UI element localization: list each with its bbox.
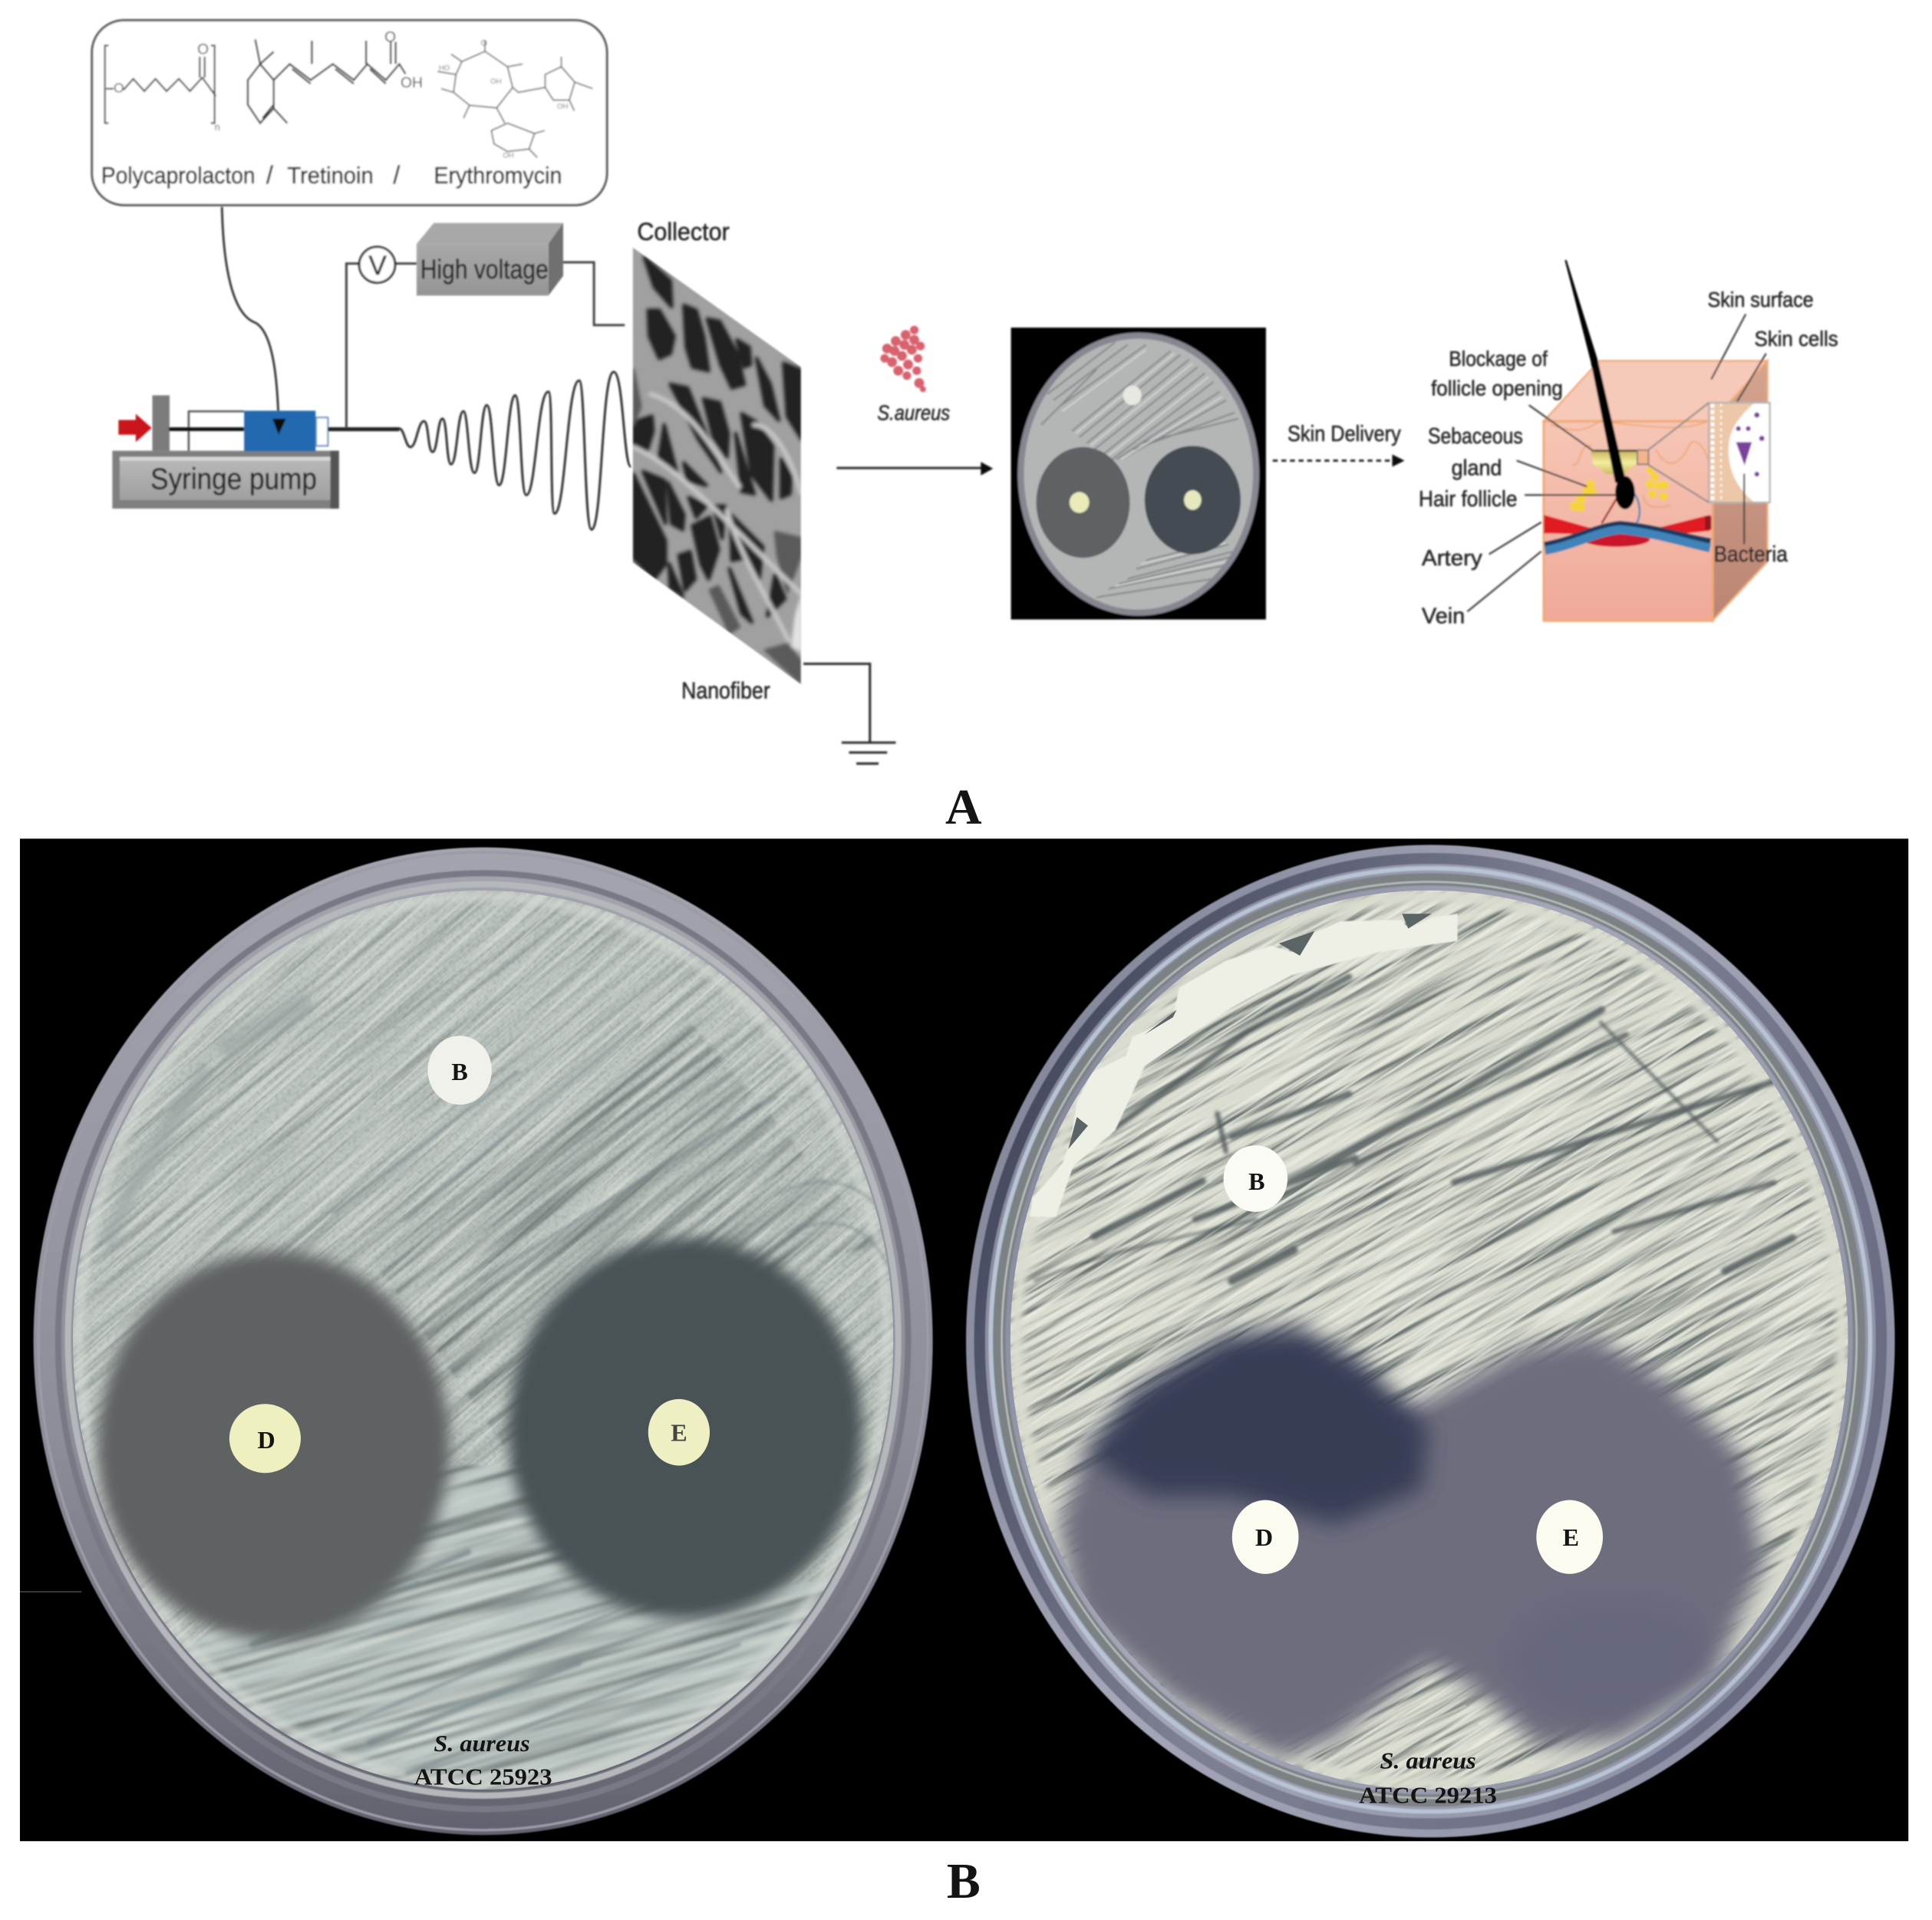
label: blockage of follicle opening: [1431, 347, 1563, 400]
icon: voltmeter: V: [368, 251, 387, 281]
disc D: D: [257, 1426, 275, 1454]
lower streak patch: [1306, 1690, 1491, 1786]
follicle capillaries: [1601, 499, 1617, 523]
gray mottled patches near edge: [105, 1001, 309, 1244]
label: hair follicle: Hair follicle: [1419, 487, 1517, 512]
label: artery: Artery: [1422, 546, 1482, 571]
label: skin surface: Skin surface: [1708, 288, 1814, 311]
blue tint in lower right of zone: [1509, 1601, 1719, 1724]
arrow: solution to syringe: [222, 207, 286, 435]
disc D: [229, 1404, 301, 1473]
structure: erythromycin: OH: [557, 102, 568, 110]
structure: tretinoin: OH: [401, 75, 423, 91]
nanofiber SEM collector: [628, 240, 807, 690]
high voltage wiring: [346, 262, 625, 429]
vein: [1545, 527, 1710, 551]
structure: polycaprolactone: O: [114, 80, 124, 95]
label: nanofiber: Nanofiber: [681, 677, 770, 703]
disc D: [1232, 1500, 1298, 1574]
skin cross-section block: [1544, 260, 1770, 621]
structure: tretinoin: O: [384, 30, 396, 46]
pusher post: [153, 395, 170, 451]
label: erythromycin: Erythromycin: [434, 163, 562, 189]
disc E: E: [1563, 1523, 1579, 1551]
dish rim: [966, 845, 1895, 1837]
structure: erythromycin: O: [480, 38, 487, 48]
lower streak field: [185, 1466, 887, 1796]
pale band beyond streaks on the upper right: [1017, 897, 1842, 1783]
label: sebaceous gland: Sebaceous: [1428, 424, 1523, 449]
merged inhibition zone: [1060, 1336, 1764, 1759]
icon: voltmeter: [359, 247, 395, 282]
label: S.aureus: S.aureus: [877, 400, 950, 424]
heavy dark streaks: [1035, 976, 1792, 1281]
pump base: [112, 451, 339, 509]
small agar plate photo: [1011, 328, 1266, 620]
syringe barrel and plunger: [169, 410, 399, 451]
arrow: skin delivery dashed: [1273, 454, 1405, 466]
stray line on photo: [20, 1591, 81, 1592]
syringe pump: [112, 395, 399, 509]
inhibition zone E: [508, 1238, 862, 1619]
structure: tretinoin: [248, 30, 423, 123]
agar lawn with streaks: [73, 891, 893, 1796]
panel letter B: B: [947, 1853, 981, 1909]
disc E: E: [671, 1418, 687, 1446]
artery lower bulge: [1583, 532, 1650, 547]
agar lawn with streaks: [1011, 891, 1848, 1790]
heavy streaks: [252, 1023, 889, 1773]
label: blockage of follicle opening: Blockage of: [1449, 347, 1548, 370]
label: tretinoin: Tretinoin: [287, 163, 374, 189]
inhibition zone D: [97, 1251, 450, 1641]
petri dish: ATCC 29213: [966, 845, 1895, 1837]
structure: polycaprolactone: O: [197, 42, 209, 58]
label: S. aureus ATCC 25923: [414, 1731, 552, 1790]
label: S. aureus ATCC 29213: [1359, 1748, 1497, 1808]
artery: [1544, 515, 1711, 537]
disc B: B: [451, 1058, 468, 1085]
structure: erythromycin: HO: [439, 64, 450, 73]
label: vein: Vein: [1422, 604, 1465, 628]
panel B: photo background: [20, 838, 1908, 1841]
high voltage box: High voltage: [420, 255, 549, 285]
inset: skin cells and bacteria: [1709, 403, 1770, 502]
pale inner edge: [79, 897, 887, 1783]
skin diagram labels and leader lines: [1419, 288, 1838, 628]
dark notches in clumps: [1068, 914, 1432, 1149]
panel A: electrospinning schematic: [92, 20, 1838, 763]
structure: erythromycin: OH: [490, 77, 502, 86]
label: slash 1: /: [266, 161, 273, 189]
dish rim: [34, 848, 933, 1835]
follicle capillary blue: [1634, 492, 1640, 523]
label: sebaceous gland: [1428, 424, 1523, 481]
sebaceous glands: [1570, 466, 1669, 512]
dark overlap zone: [1083, 1326, 1428, 1525]
label: bacteria: Bacteria: [1714, 542, 1789, 567]
electrospinning jet: [399, 372, 631, 529]
icon: red push arrow: [118, 413, 152, 442]
disc B: [427, 1036, 492, 1105]
structure: erythromycin: OH: [503, 152, 514, 160]
label: skin cells: Skin cells: [1755, 327, 1838, 351]
ground connection: [803, 664, 895, 763]
disc D: D: [1255, 1523, 1273, 1551]
hair shaft and bulb: [1564, 260, 1635, 509]
arrow: to agar plate: [836, 462, 993, 476]
high voltage box: [417, 223, 563, 295]
structure: polycaprolactone: [105, 42, 220, 133]
label: S. aureus ATCC 29213: ATCC 29213: [1359, 1782, 1497, 1808]
label: S. aureus ATCC 25923: S. aureus: [434, 1731, 530, 1757]
follicle blockage: [1591, 451, 1639, 474]
label: polycaprolacton: Polycaprolacton: [101, 163, 256, 189]
label: S. aureus ATCC 25923: ATCC 25923: [414, 1764, 552, 1790]
icon: S. aureus bacteria cluster: [880, 326, 926, 392]
structure: polycaprolactone: n: [215, 121, 220, 133]
callout: chemical components: [92, 20, 607, 205]
label: collector: Collector: [637, 218, 730, 245]
petri dish: ATCC 25923: [34, 848, 933, 1835]
structure: erythromycin: [437, 38, 593, 160]
panel letter A: A: [945, 779, 982, 835]
disc B: [1224, 1145, 1287, 1212]
darker streak band between the zones: [370, 1023, 881, 1466]
label: S. aureus ATCC 29213: S. aureus: [1380, 1748, 1476, 1774]
label: slash 2: /: [393, 161, 400, 189]
label: blockage of follicle opening: follicle opening: [1431, 376, 1563, 400]
label: sebaceous gland: gland: [1452, 456, 1502, 481]
disc B: B: [1248, 1167, 1265, 1195]
disc E: [648, 1399, 710, 1466]
disc E: [1536, 1500, 1603, 1574]
white growth clumps: [1030, 914, 1458, 1217]
pump base: Syringe pump: [150, 463, 317, 496]
label: skin delivery: Skin Delivery: [1287, 422, 1401, 446]
